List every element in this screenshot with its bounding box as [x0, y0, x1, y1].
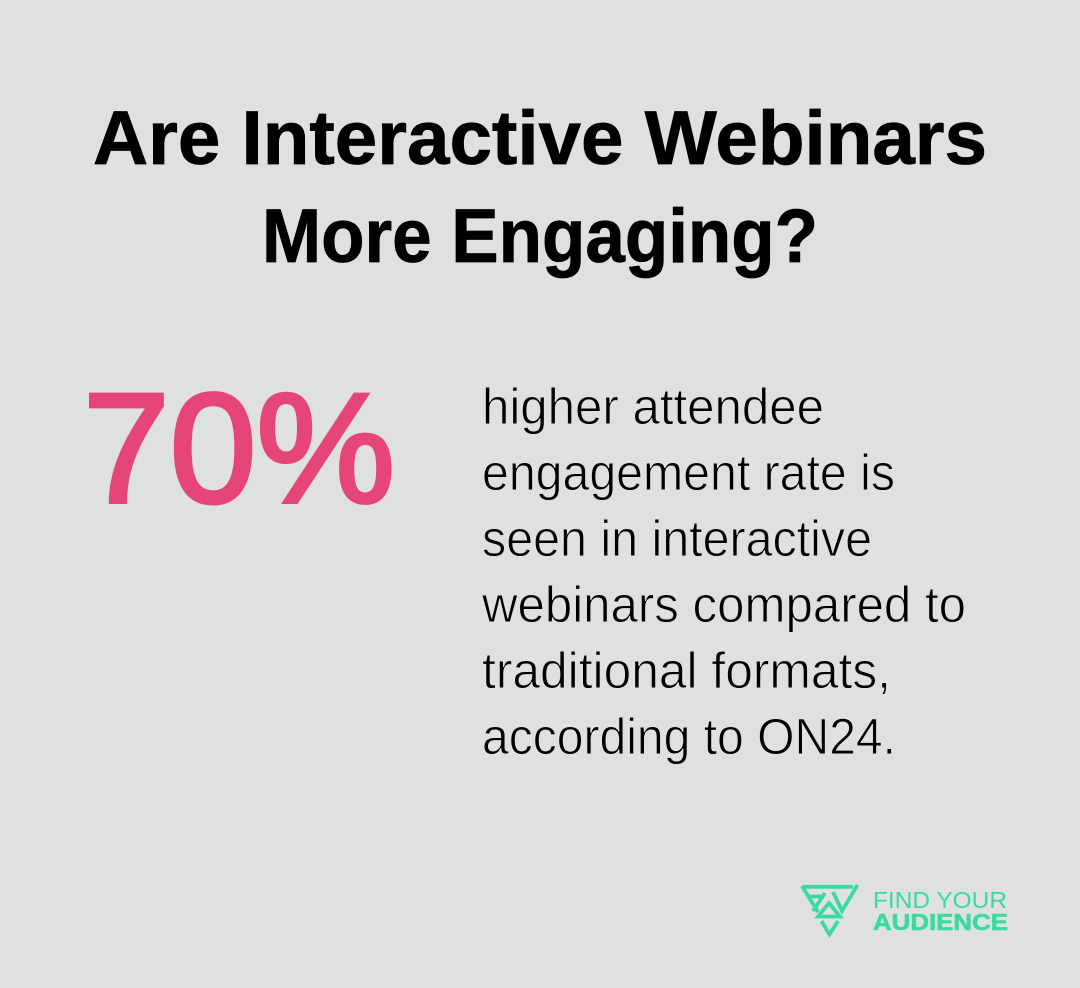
- description text: traditional formats,: [482, 642, 891, 699]
- big statistic: 70%: 70%: [83, 362, 395, 536]
- description text: according to ON24.: [482, 708, 896, 765]
- description text: seen in interactive: [482, 510, 872, 567]
- logo wordmark: FIND YOUR: [873, 887, 1007, 913]
- description text: higher attendee: [482, 378, 824, 435]
- logo wordmark: [873, 887, 1008, 935]
- title: More Engaging?: [262, 194, 818, 279]
- description text: [481, 378, 966, 765]
- description text: webinars compared to: [481, 576, 966, 633]
- description text: engagement rate is: [482, 444, 895, 501]
- title: Are Interactive Webinars: [93, 96, 987, 181]
- logo: Find Your Audience: [802, 885, 1008, 935]
- icon: triangles mark: [802, 885, 858, 934]
- title: [93, 96, 987, 279]
- logo wordmark: AUDIENCE: [873, 909, 1008, 935]
